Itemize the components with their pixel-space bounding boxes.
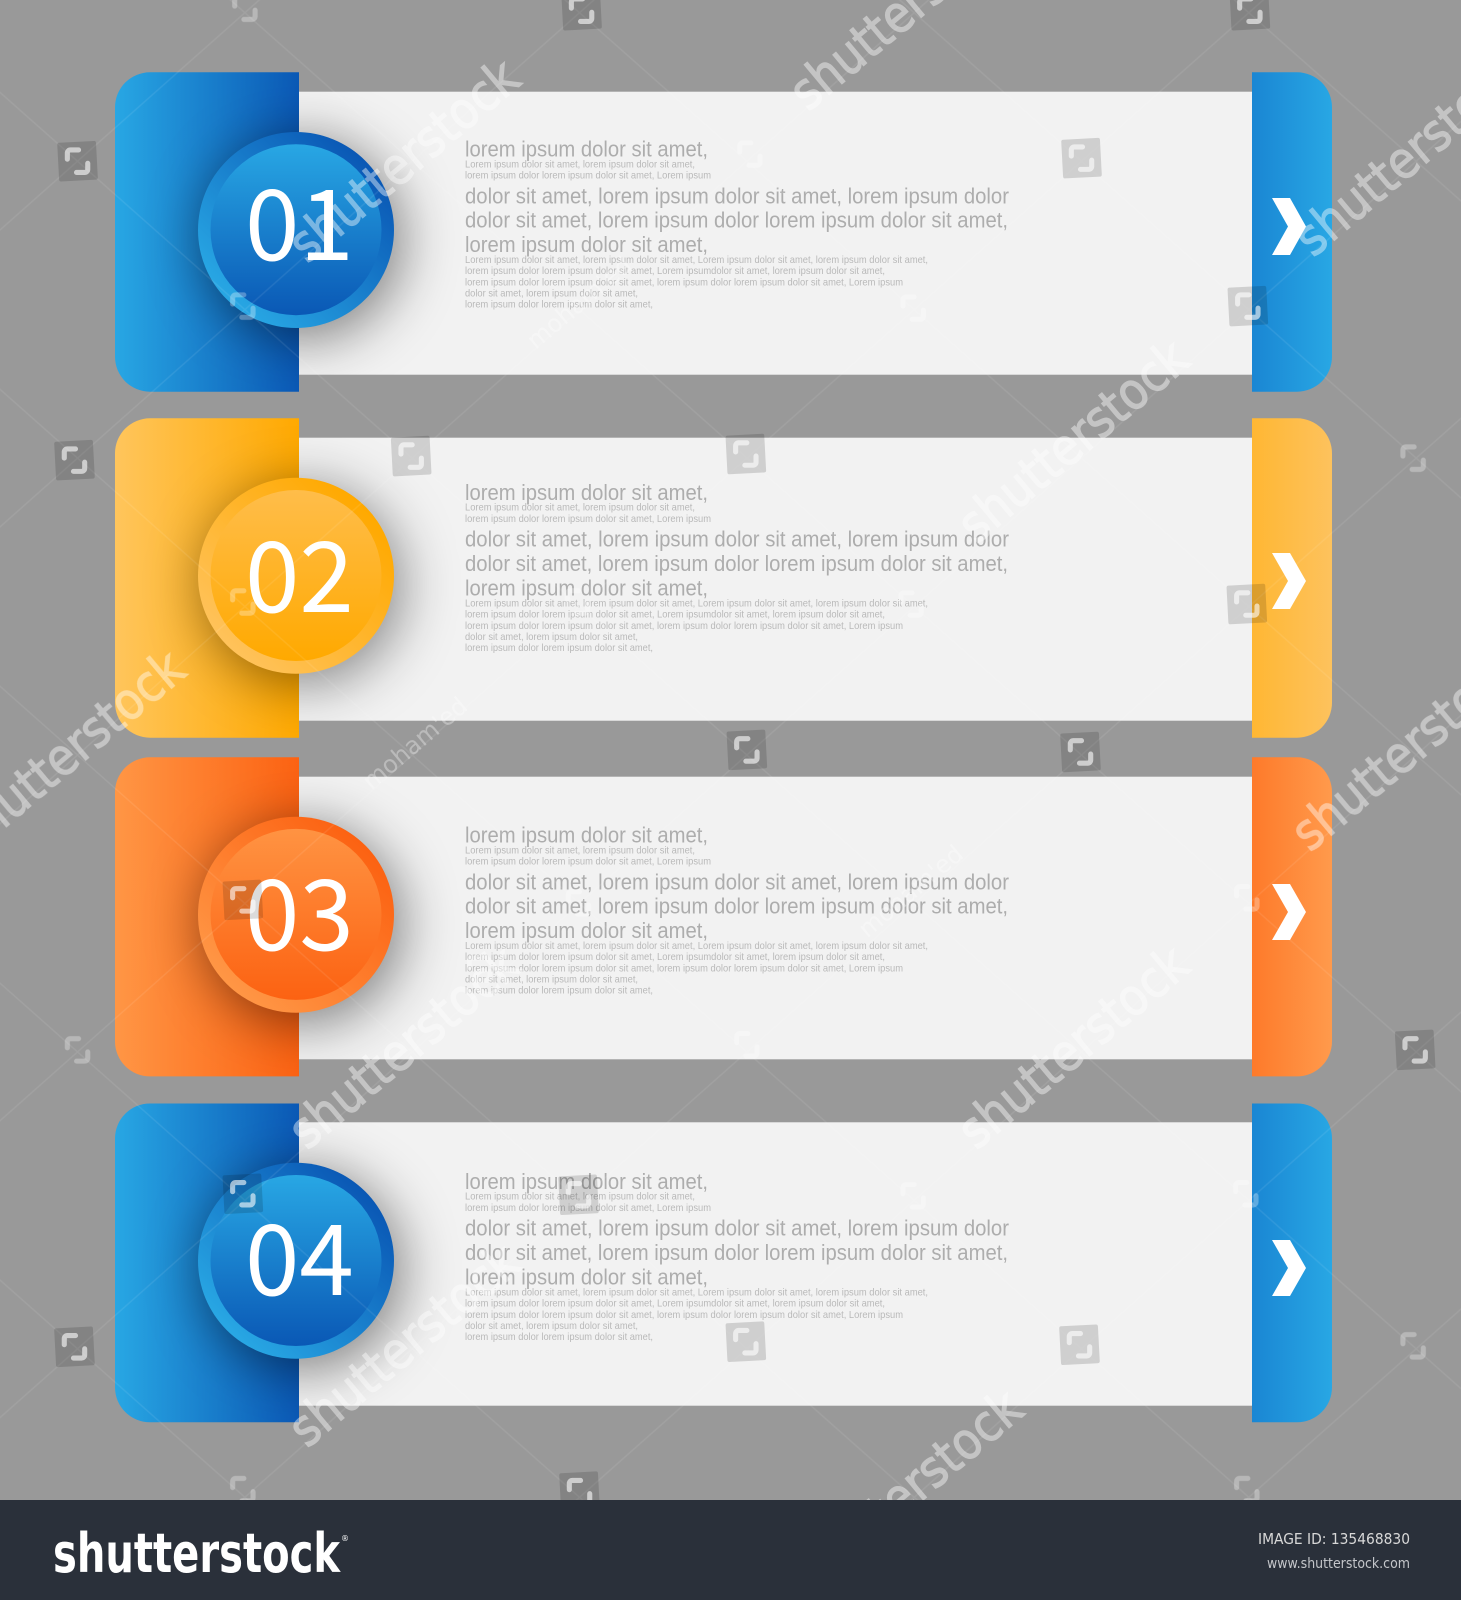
text block 03 (465, 822, 1009, 997)
number badge 02: 02 (245, 499, 354, 641)
right tab 03 (1252, 757, 1332, 1076)
registered mark: ® (341, 1534, 349, 1543)
text block 02: dolor sit amet, lorem ipsum dolor sit amet, lorem ipsum dolor (465, 527, 1009, 552)
text block 01: dolor sit amet, lorem ipsum dolor lorem ipsum dolor sit amet, (465, 208, 1008, 233)
text block 02: dolor sit amet, lorem ipsum dolor sit amet, (465, 632, 638, 643)
watermark overlay: shutterstock (278, 934, 531, 1161)
content card 01 (299, 92, 1252, 375)
panel: row 02 (115, 418, 1332, 738)
text block 01: lorem ipsum dolor lorem ipsum dolor sit amet, (465, 300, 653, 311)
text block 04: lorem ipsum dolor lorem ipsum dolor sit amet, lorem ipsum dolor lorem ipsum dolor sit amet, Lorem ipsum (465, 1310, 903, 1321)
text block 04: Lorem ipsum dolor sit amet, lorem ipsum dolor sit amet, (465, 1192, 695, 1203)
chevron arrow 04 (1272, 1240, 1306, 1296)
text block 01: Lorem ipsum dolor sit amet, lorem ipsum dolor sit amet, (465, 159, 695, 170)
panel: row 03 (115, 757, 1332, 1076)
text block 02: Lorem ipsum dolor sit amet, lorem ipsum dolor sit amet, Lorem ipsum dolor sit amet, lorem ipsum dolor sit amet, (465, 598, 928, 609)
watermark overlay: shutterstock (947, 934, 1201, 1161)
left tab 04 (115, 1104, 299, 1422)
watermark overlay: moham'ed (357, 691, 473, 795)
text block 02: dolor sit amet, lorem ipsum dolor lorem ipsum dolor sit amet, (465, 551, 1008, 576)
chevron arrow 01 (1272, 198, 1306, 255)
text block 03: lorem ipsum dolor lorem ipsum dolor sit amet, (465, 986, 653, 997)
chevron arrow 02 (1272, 553, 1306, 609)
text block 01: lorem ipsum dolor sit amet, (465, 136, 708, 162)
text block 04: lorem ipsum dolor lorem ipsum dolor sit amet, (465, 1332, 653, 1343)
content card 04 (299, 1122, 1252, 1406)
text block 03: Lorem ipsum dolor sit amet, lorem ipsum dolor sit amet, (465, 845, 695, 856)
text block 01: dolor sit amet, lorem ipsum dolor sit amet, lorem ipsum dolor (465, 183, 1009, 208)
left tab 03 (115, 757, 299, 1076)
text block 04 (465, 1169, 1009, 1343)
text block 04: dolor sit amet, lorem ipsum dolor sit amet, lorem ipsum dolor (465, 1216, 1009, 1241)
left tab 02 (115, 418, 299, 738)
text block 03: lorem ipsum dolor sit amet, (465, 918, 708, 943)
text block 02: Lorem ipsum dolor sit amet, lorem ipsum dolor sit amet, (465, 503, 695, 514)
text block 02: lorem ipsum dolor lorem ipsum dolor sit amet, Lorem ipsumdolor sit amet, lorem ipsum dolor sit amet, (465, 610, 885, 620)
text block 04: dolor sit amet, lorem ipsum dolor sit amet, (465, 1321, 638, 1332)
text block 03: dolor sit amet, lorem ipsum dolor sit amet, (465, 974, 638, 986)
text block 01: lorem ipsum dolor lorem ipsum dolor sit amet, lorem ipsum dolor lorem ipsum dolor sit amet, Lorem ipsum (465, 278, 903, 288)
text block 03: dolor sit amet, lorem ipsum dolor sit amet, lorem ipsum dolor (465, 869, 1009, 894)
circle shadow 03 (202, 824, 402, 1024)
text block 03: Lorem ipsum dolor sit amet, lorem ipsum dolor sit amet, Lorem ipsum dolor sit amet, lorem ipsum dolor sit amet, (465, 941, 928, 952)
text block 04: lorem ipsum dolor sit amet, (465, 1169, 708, 1194)
image id: IMAGE ID: 135468830 (1258, 1530, 1410, 1548)
text block 04: lorem ipsum dolor lorem ipsum dolor sit amet, Lorem ipsum (465, 1203, 711, 1214)
content card 02 (299, 438, 1252, 721)
text block 02: lorem ipsum dolor lorem ipsum dolor sit amet, Lorem ipsum (465, 514, 711, 525)
circle shadow 04 (202, 1170, 402, 1370)
text block 02: lorem ipsum dolor lorem ipsum dolor sit amet, (465, 643, 653, 654)
watermark overlay: shutterstock (781, 1378, 1035, 1600)
right tab 04 (1252, 1104, 1332, 1422)
text block 03: lorem ipsum dolor lorem ipsum dolor sit amet, Lorem ipsumdolor sit amet, lorem ipsum dolor sit amet, (465, 952, 885, 963)
number badge 02 (198, 478, 394, 674)
text block 02: lorem ipsum dolor sit amet, (465, 575, 708, 600)
watermark overlay: shutterstock (947, 328, 1201, 555)
watermark overlay: moham'ed (521, 250, 637, 355)
text block 02: lorem ipsum dolor sit amet, (465, 480, 708, 505)
text block 03: lorem ipsum dolor lorem ipsum dolor sit amet, lorem ipsum dolor lorem ipsum dolor sit amet, Lorem ipsum (465, 964, 903, 974)
circle shadow 02 (202, 485, 402, 685)
text block 01 (465, 136, 1009, 311)
number badge 03 (198, 817, 394, 1013)
number badge 04 (198, 1163, 394, 1359)
right tab 01 (1252, 72, 1332, 392)
text block 01: dolor sit amet, lorem ipsum dolor sit amet, (465, 288, 638, 300)
left tab 01 (115, 72, 299, 392)
right tab 02 (1252, 418, 1332, 738)
watermark overlay: shutterstock (278, 1232, 531, 1459)
text block 01: lorem ipsum dolor lorem ipsum dolor sit amet, Lorem ipsum (465, 171, 711, 182)
number badge 04: 04 (245, 1182, 354, 1324)
chevron arrow 03 (1272, 884, 1306, 940)
number badge 01 (198, 132, 394, 328)
footer logo: shutterstock (53, 1522, 341, 1585)
text block 02 (465, 480, 1009, 654)
text block 04: lorem ipsum dolor lorem ipsum dolor sit amet, Lorem ipsumdolor sit amet, lorem ipsum dolor sit amet, (465, 1299, 885, 1310)
panel: row 04 (115, 1104, 1332, 1422)
text block 03: lorem ipsum dolor sit amet, (465, 822, 708, 848)
text block 04: dolor sit amet, lorem ipsum dolor lorem ipsum dolor sit amet, (465, 1240, 1008, 1265)
text block 02: lorem ipsum dolor lorem ipsum dolor sit amet, lorem ipsum dolor lorem ipsum dolor sit amet, Lorem ipsum (465, 621, 903, 632)
text block 01: lorem ipsum dolor lorem ipsum dolor sit amet, Lorem ipsumdolor sit amet, lorem ipsum dolor sit amet, (465, 266, 885, 277)
text block 04: Lorem ipsum dolor sit amet, lorem ipsum dolor sit amet, Lorem ipsum dolor sit amet, lorem ipsum dolor sit amet, (465, 1287, 928, 1298)
text block 03: dolor sit amet, lorem ipsum dolor lorem ipsum dolor sit amet, (465, 894, 1008, 919)
text block 03: lorem ipsum dolor lorem ipsum dolor sit amet, Lorem ipsum (465, 857, 711, 868)
watermark overlay: moham'ed (852, 839, 969, 943)
text block 01: lorem ipsum dolor sit amet, (465, 232, 708, 257)
text block 01: Lorem ipsum dolor sit amet, lorem ipsum dolor sit amet, Lorem ipsum dolor sit amet, lorem ipsum dolor sit amet, (465, 255, 928, 266)
number badge 01: 01 (245, 147, 354, 289)
watermark overlay: shutterstock (278, 48, 531, 274)
number badge 03: 03 (245, 837, 354, 979)
text block 04: lorem ipsum dolor sit amet, (465, 1264, 708, 1289)
footer bar (0, 1500, 1461, 1600)
content card 03 (299, 777, 1252, 1059)
website: www.shutterstock.com (1267, 1556, 1410, 1572)
circle shadow 01 (202, 139, 402, 339)
panel: row 01 (115, 72, 1332, 392)
